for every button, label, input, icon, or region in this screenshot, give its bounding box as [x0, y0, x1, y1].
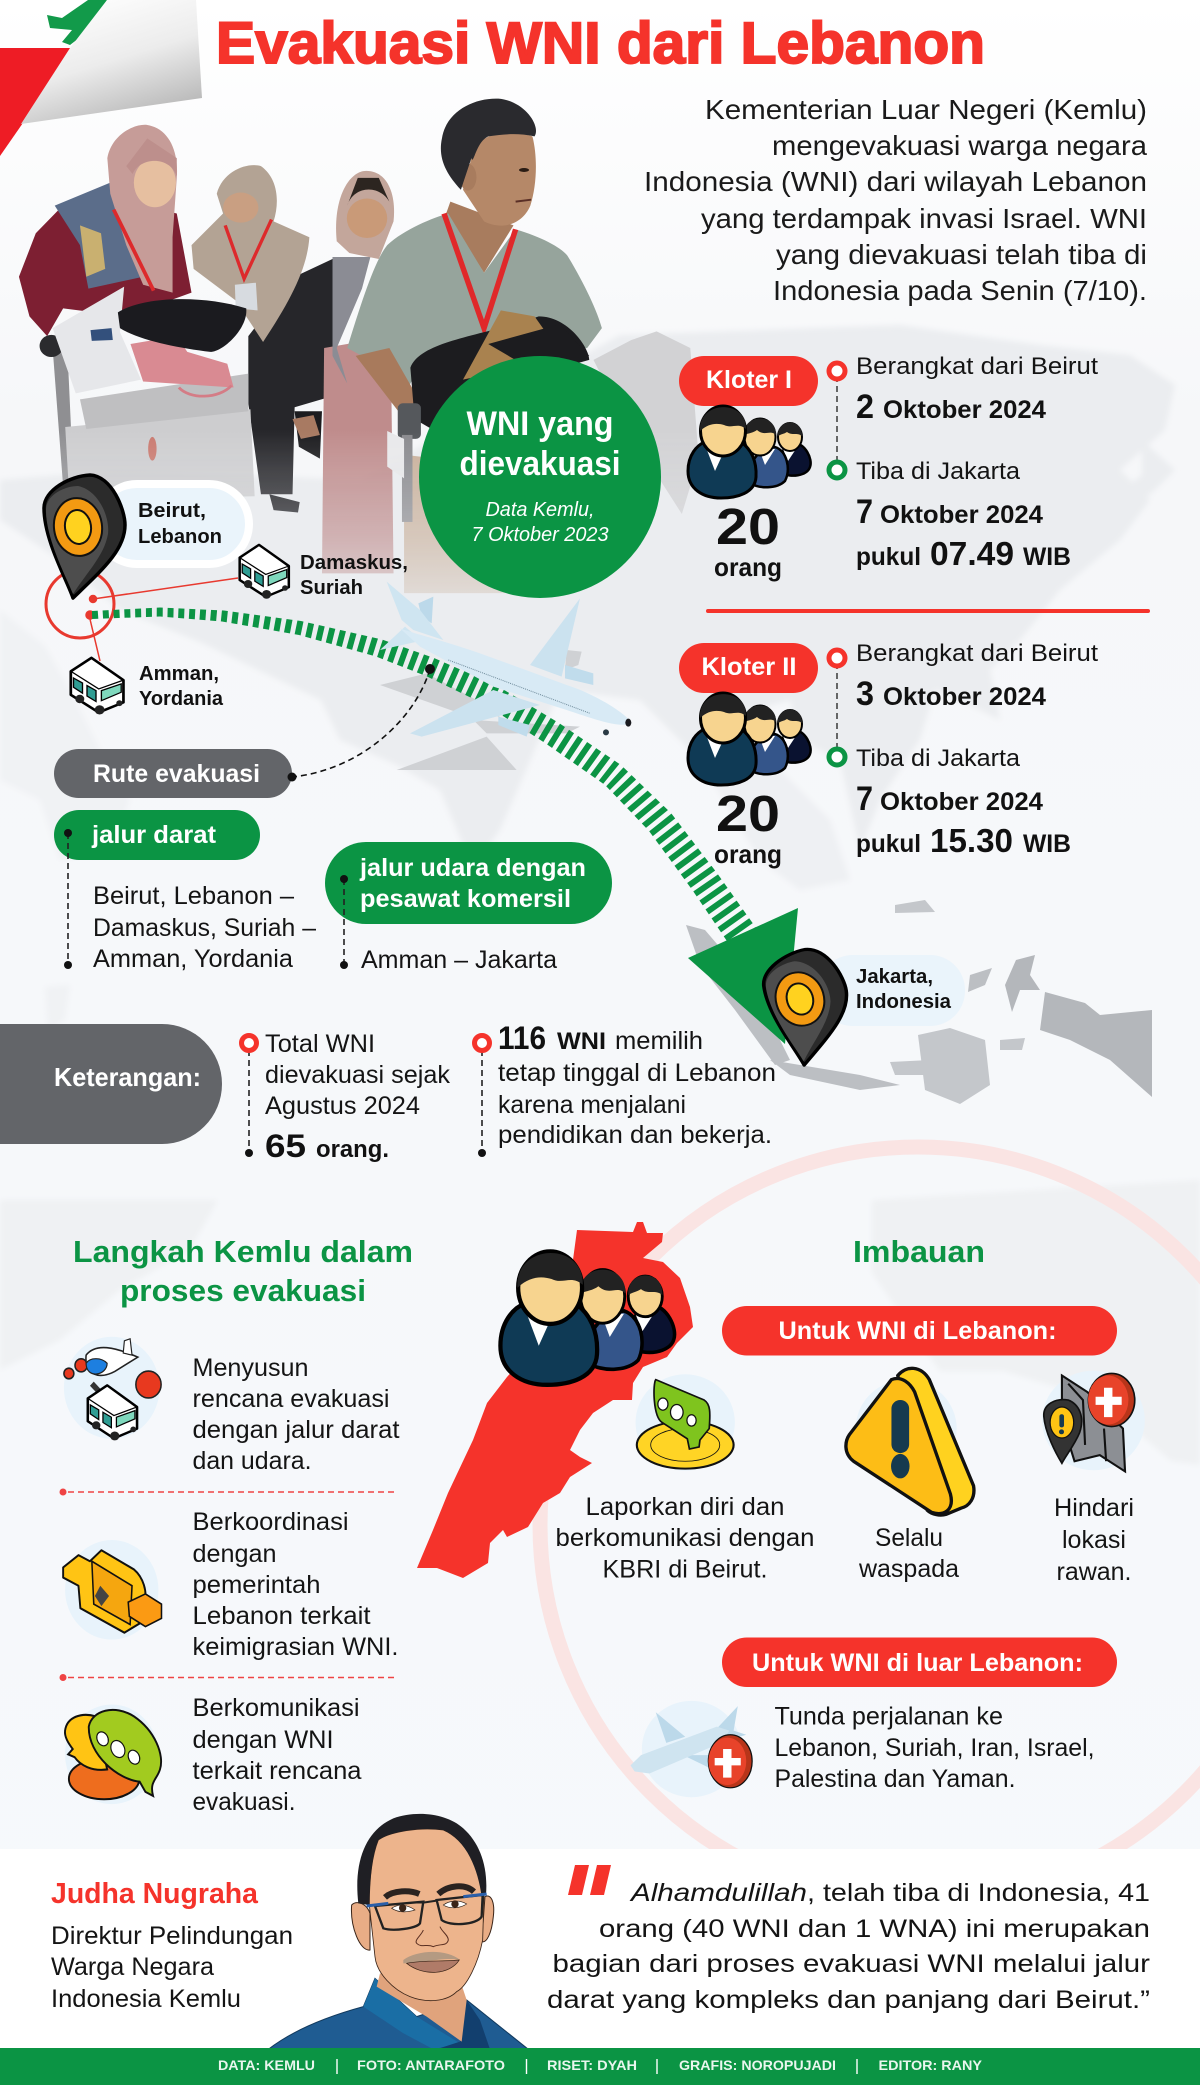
panel: Kloter II: 15.30 — [930, 822, 1013, 859]
icon: Jakarta location pin — [760, 945, 856, 1069]
quote text: bagian dari proses evakuasi WNI melalui jalur — [552, 1950, 1150, 1978]
icon: Jakarta bubble — [818, 955, 965, 1026]
panel: Kloter II: Kloter II — [702, 653, 796, 681]
heading: Langkah Kemlu — [73, 1234, 413, 1308]
footer credits: FOTO: ANTARAFOTO — [357, 2057, 505, 2073]
step 2: koordinasi: Berkoordinasi — [192, 1508, 348, 1536]
heading: Langkah Kemlu: Langkah Kemlu dalam — [73, 1234, 413, 1269]
advice: waspada: waspada — [858, 1555, 959, 1583]
step 3: komunikasi: Berkomunikasi — [192, 1694, 360, 1722]
label: Jakarta, Indonesia: Jakarta, — [856, 966, 933, 988]
note: 116 WNI: karena menjalani — [498, 1091, 686, 1119]
intro text: yang terdampak invasi Israel. WNI — [701, 203, 1147, 234]
circle: WNI yang dievakuasi: WNI yang — [466, 405, 614, 443]
circle: WNI yang dievakuasi: Data Kemlu, — [486, 499, 594, 521]
name and title: Judha Nugraha: Warga Negara — [51, 1953, 214, 1981]
intro text: Indonesia pada Senin (7/10). — [773, 275, 1147, 306]
advice: tunda perjalanan — [630, 1701, 1094, 1797]
route air: jalur udara: pesawat komersil — [360, 885, 571, 913]
note: total WNI: Agustus 2024 — [265, 1092, 420, 1120]
icon: immigration device — [63, 1540, 161, 1640]
pill: Rute evakuasi: Rute evakuasi — [93, 760, 260, 788]
panel: Kloter I: pukul — [856, 543, 921, 571]
panel: Kloter II: Berangkat dari Beirut — [856, 640, 1098, 667]
step 1: rencana evakuasi: Menyusun — [192, 1354, 308, 1382]
panel: Kloter I — [679, 353, 1098, 582]
intro text: yang dievakuasi telah tiba di — [776, 239, 1147, 270]
icon: plane with no-travel sign — [630, 1701, 752, 1797]
note: total WNI: 65 — [265, 1128, 306, 1164]
icon: quotation marks — [568, 1865, 611, 1895]
panel: Kloter I: Oktober 2024 — [883, 396, 1046, 424]
icon: group of citizens — [500, 1251, 675, 1385]
note: 116 WNI: 116 — [498, 1020, 546, 1056]
name and title: Judha Nugraha — [51, 1878, 293, 2013]
advice: lokasi rawan — [1042, 1371, 1145, 1586]
advice: lapor: Laporkan diri dan — [586, 1493, 784, 1521]
label: Amman, Yordania: Amman, — [139, 663, 219, 685]
circle: WNI yang dievakuasi: 7 Oktober 2023 — [472, 524, 608, 546]
panel: Kloter II — [679, 640, 1098, 869]
intro text — [644, 94, 1147, 306]
pill: Untuk WNI di luar Lebanon — [722, 1638, 1117, 1687]
step 3: komunikasi: evakuasi. — [192, 1788, 296, 1816]
icon: chat on map plate — [636, 1374, 735, 1471]
step 2: koordinasi: Lebanon terkait — [192, 1602, 371, 1630]
footer credits: DATA: KEMLU — [218, 2057, 315, 2073]
bubble: Beirut, Lebanon: Beirut, — [138, 500, 206, 522]
note: 116 WNI: memilih — [615, 1027, 703, 1055]
advice: lapor — [556, 1374, 814, 1584]
panel: Kloter I: 20 — [716, 498, 780, 555]
advice: tunda perjalanan: Tunda perjalanan ke — [774, 1702, 1003, 1730]
panel: Kloter I: orang — [714, 552, 782, 582]
name and title: Judha Nugraha: Direktur Pelindungan — [51, 1922, 293, 1950]
panel: Kloter II: Oktober 2024 — [883, 683, 1046, 711]
route land: jalur darat: Beirut, Lebanon – — [93, 882, 294, 910]
photo: evacuated citizens with luggage trolley — [19, 99, 699, 593]
title: Evakuasi WNI dari Lebanon — [216, 11, 985, 76]
note: total WNI — [242, 1030, 451, 1164]
circle: WNI yang dievakuasi: dievakuasi — [460, 445, 620, 483]
panel: Kloter II: orang — [714, 839, 782, 869]
photo: woman in maroon — [19, 125, 192, 336]
step 1: rencana evakuasi — [64, 1337, 400, 1475]
intro text: mengevakuasi warga negara — [772, 130, 1147, 161]
quote text — [547, 1879, 1150, 2014]
panel: quote background — [0, 1849, 1200, 2049]
icon: chat bubbles — [65, 1705, 161, 1804]
route land: jalur darat — [54, 810, 316, 973]
pill: Untuk WNI di Lebanon: Untuk WNI di Lebanon: — [778, 1317, 1056, 1345]
photo: woman in beige hijab — [192, 165, 337, 512]
pill: Untuk WNI di Lebanon — [722, 1306, 1117, 1356]
separator — [60, 1674, 394, 1681]
panel: Kloter I: Berangkat dari Beirut — [856, 353, 1098, 380]
panel: Kloter I: 2 — [856, 388, 874, 426]
advice: lapor: berkomunikasi dengan — [556, 1524, 814, 1552]
step 1: rencana evakuasi: rencana evakuasi — [192, 1385, 390, 1413]
decorative red ring — [540, 1147, 1200, 1903]
panel: Kloter I: Oktober 2024 — [880, 501, 1043, 529]
pill: Untuk WNI di luar Lebanon: Untuk WNI di luar Lebanon: — [752, 1649, 1083, 1677]
label: Jakarta, Indonesia — [856, 966, 952, 1013]
heading: Imbauan: Imbauan — [853, 1234, 985, 1269]
step 3: komunikasi: dengan WNI — [192, 1726, 334, 1754]
panel: Kloter II: 7 — [856, 780, 873, 818]
step 2: koordinasi — [63, 1508, 398, 1661]
label: Damaskus, Suriah — [300, 552, 408, 599]
advice: tunda perjalanan: Palestina dan Yaman. — [774, 1765, 1016, 1793]
icon: plane and van plan — [64, 1337, 161, 1440]
quote text: orang (40 WNI dan 1 WNA) ini merupakan — [599, 1915, 1150, 1943]
divider between flights — [706, 609, 1150, 613]
advice: waspada — [846, 1368, 974, 1583]
step 2: koordinasi: pemerintah — [192, 1571, 320, 1599]
circle: WNI yang dievakuasi — [419, 356, 661, 598]
panel: Kloter I: Tiba di Jakarta — [856, 458, 1021, 485]
label: Damaskus, Suriah: Damaskus, — [300, 552, 408, 574]
advice: lokasi rawan: lokasi — [1062, 1526, 1126, 1554]
route air: jalur udara: Amman – Jakarta — [361, 946, 557, 974]
photo: woman in pink dress — [293, 171, 394, 573]
map: Lebanon — [417, 1222, 693, 1578]
route arrowhead — [688, 908, 798, 1044]
note: 116 WNI — [474, 1020, 776, 1157]
advice: tunda perjalanan: Lebanon, Suriah, Iran, Israel, — [774, 1734, 1094, 1762]
photo: man in grey shirt — [347, 99, 602, 593]
panel: Kloter II: pukul — [856, 830, 921, 858]
route connector lines — [46, 570, 238, 661]
panel: Kloter II: Oktober 2024 — [880, 788, 1043, 816]
icon: map with pin and cross — [1042, 1371, 1145, 1471]
intro text: Kementerian Luar Negeri (Kemlu) — [705, 94, 1147, 125]
footer credits: EDITOR: RANY — [878, 2057, 983, 2073]
icon: Beirut location pin — [44, 475, 125, 598]
panel: Kloter I: Kloter I — [706, 366, 792, 394]
panel: Kloter I: 07.49 — [930, 535, 1014, 572]
icon: van Amman — [71, 658, 123, 715]
separator — [60, 1488, 394, 1496]
note: total WNI: orang. — [316, 1136, 389, 1163]
footer credits: RISET: DYAH — [547, 2057, 637, 2073]
route land: jalur darat: Amman, Yordania — [93, 945, 293, 973]
panel: Kloter II: 3 — [856, 675, 874, 713]
step 3: komunikasi — [65, 1694, 362, 1816]
advice: lokasi rawan: rawan. — [1056, 1558, 1132, 1586]
portrait: Judha Nugraha — [268, 1814, 528, 2049]
advice: waspada: Selalu — [875, 1524, 943, 1552]
bubble: Beirut, Lebanon: Lebanon — [138, 526, 222, 548]
icon: warning triangle — [846, 1368, 974, 1515]
note: total WNI: dievakuasi sejak — [265, 1061, 451, 1089]
panel: Kloter II: Tiba di Jakarta — [856, 745, 1021, 772]
label: Amman, Yordania: Yordania — [139, 688, 224, 710]
photo: right bags — [593, 331, 699, 514]
route air: jalur udara — [325, 842, 612, 974]
label: Amman, Yordania — [139, 663, 224, 710]
panel: Kloter II: WIB — [1023, 830, 1071, 858]
note: 116 WNI: WNI — [557, 1028, 606, 1055]
heading: Langkah Kemlu: proses evakuasi — [120, 1273, 366, 1308]
footer credits — [0, 2048, 1200, 2085]
footer credits: GRAFIS: NOROPUJADI — [679, 2057, 836, 2073]
route air: jalur udara: jalur udara dengan — [359, 854, 586, 882]
photo: trolley and luggage — [40, 287, 255, 500]
airplane — [380, 582, 632, 737]
step 1: rencana evakuasi: dengan jalur darat — [192, 1416, 400, 1444]
note: 116 WNI: tetap tinggal di Lebanon — [498, 1059, 776, 1087]
panel: Kloter I: 7 — [856, 493, 873, 531]
icon: van Damaskus — [240, 545, 289, 599]
quote text: Alhamdulillah — [629, 1879, 807, 1907]
pill: Rute evakuasi — [54, 749, 296, 798]
world map background — [0, 325, 1200, 1465]
route marker dot and leader line — [292, 664, 435, 777]
note: 116 WNI: pendidikan dan bekerja. — [498, 1121, 772, 1149]
route land: jalur darat: jalur darat — [91, 821, 217, 849]
step 3: komunikasi: terkait rencana — [192, 1757, 362, 1785]
note: total WNI: Total WNI — [265, 1030, 375, 1058]
step 2: koordinasi: dengan — [192, 1540, 276, 1568]
airplane shadow — [380, 650, 582, 770]
quote text: , telah tiba di Indonesia, 41 — [807, 1879, 1150, 1907]
flag corner with peel — [0, 0, 202, 156]
name and title: Judha Nugraha: Judha Nugraha — [51, 1878, 259, 1910]
label: Damaskus, Suriah: Suriah — [300, 577, 363, 599]
pill: Keterangan — [0, 1024, 222, 1144]
advice: lapor: KBRI di Beirut. — [602, 1556, 768, 1584]
evacuation route dashed arrow — [92, 608, 756, 940]
advice: lokasi rawan: Hindari — [1054, 1494, 1134, 1522]
name and title: Judha Nugraha: Indonesia Kemlu — [51, 1985, 241, 2013]
route land: jalur darat: Damaskus, Suriah – — [93, 914, 316, 942]
quote text: darat yang kompleks dan panjang dari Beirut.” — [547, 1986, 1150, 2014]
step 1: rencana evakuasi: dan udara. — [192, 1447, 312, 1475]
panel: Kloter II: 20 — [716, 785, 780, 842]
panel: Kloter I: WIB — [1023, 543, 1071, 571]
label: Jakarta, Indonesia: Indonesia — [856, 991, 952, 1013]
step 2: koordinasi: keimigrasian WNI. — [192, 1633, 398, 1661]
intro text: Indonesia (WNI) dari wilayah Lebanon — [644, 166, 1147, 197]
bubble: Beirut, Lebanon — [97, 484, 249, 564]
pill: Keterangan: Keterangan: — [54, 1062, 201, 1092]
